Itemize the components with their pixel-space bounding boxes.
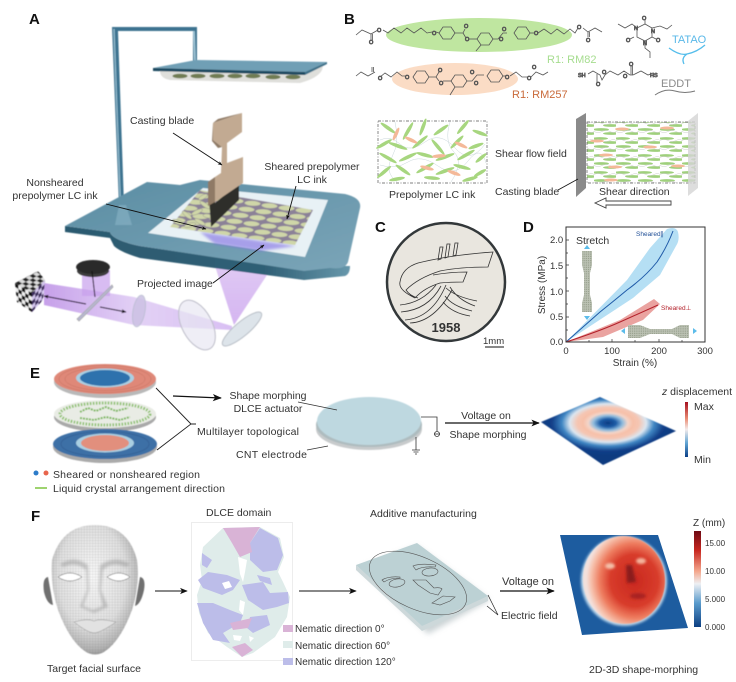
legend: region: Sheared or nonsheared region <box>53 469 200 481</box>
bracket lines <box>156 388 196 450</box>
label: EDDT <box>655 78 695 95</box>
label: CNT electrode: CNT electrode <box>236 449 307 461</box>
curve: sheared parallel <box>566 231 673 342</box>
arrow: to manufacturing <box>299 590 356 592</box>
label: projected image: Projected image <box>137 278 213 290</box>
label: TATAO: TATAO <box>672 34 707 46</box>
box: sheared ink <box>576 113 698 197</box>
panel: B molecules and shear alignment <box>344 11 707 208</box>
actuator disc <box>316 397 422 450</box>
molecule: RM257: O <box>505 75 510 81</box>
band: sheared perpendicular <box>566 299 660 342</box>
molecule: TATAO: N <box>643 41 647 47</box>
label: prepolymer LC ink: Prepolymer LC ink <box>389 189 476 201</box>
molecule: RM257: O <box>474 81 479 87</box>
molecule: RM257: O <box>532 65 537 71</box>
optical path <box>15 260 266 356</box>
legend: nematic directions <box>283 624 396 668</box>
colorbar min: Min <box>694 454 711 466</box>
label: EDDT: EDDT <box>661 78 691 90</box>
molecule: EDDT: O <box>596 82 601 88</box>
legend: nematic directions: Nematic direction 60° <box>295 641 390 652</box>
molecule: TATAO: N <box>651 29 655 35</box>
colorbar <box>685 402 688 457</box>
colorbar labels: 0.000 <box>705 623 726 632</box>
axis tick labels: 100 <box>604 346 620 357</box>
label: casting blade: Casting blade <box>495 186 559 198</box>
bottom disc <box>53 429 157 463</box>
molecule: EDDT <box>578 62 658 88</box>
legend: nematic directions: Nematic direction 120° <box>295 657 396 668</box>
leader lines <box>106 133 296 283</box>
molecule: RM257: O <box>378 76 383 82</box>
molecule: RM82: O <box>586 38 591 44</box>
projection beam to stage <box>215 266 267 325</box>
molecule: RM82: O <box>534 31 539 37</box>
colorbar labels: 15.00 <box>705 539 726 548</box>
label: sheared ink: LC ink <box>297 174 328 186</box>
label: voltage on: Voltage on <box>502 576 554 588</box>
purple beams <box>44 283 232 330</box>
circuit wiring <box>412 417 440 454</box>
eyes <box>58 573 130 581</box>
arrow to actuator <box>173 396 221 398</box>
leader: casting blade <box>558 179 578 190</box>
label: voltage on: Voltage on <box>461 410 511 422</box>
vertical dogbone sample <box>582 245 592 320</box>
axis titles: Strain (%) <box>613 358 657 369</box>
colorbar labels <box>705 539 726 632</box>
panel label F: F <box>31 508 40 525</box>
molecule: RM82: O <box>377 28 382 34</box>
arrow: voltage <box>445 422 539 424</box>
label: RM82: R1: RM82 <box>547 54 597 66</box>
horizontal dogbone sample <box>621 325 697 338</box>
DMD chip <box>15 271 45 312</box>
molecule: RM82: O <box>432 31 437 37</box>
mirror <box>218 308 266 350</box>
black target disc <box>76 260 110 277</box>
scale bar: 1mm <box>483 336 504 347</box>
label: shape morphing actuator: DLCE actuator <box>234 403 303 415</box>
molecule: RM257: O <box>439 81 444 87</box>
logo coin: 1958 <box>432 320 460 335</box>
mesh face <box>44 525 144 654</box>
molecule: EDDT: SH <box>578 73 586 79</box>
label: target facial surface: Target facial surface <box>47 663 141 675</box>
ink layer <box>170 190 313 245</box>
molecule: RM82: O <box>369 40 374 46</box>
molecule: RM257: O <box>470 70 475 76</box>
panel: E actuator <box>30 364 732 495</box>
optical arrows <box>44 271 126 312</box>
panel: A printing setup <box>12 11 360 356</box>
molecule: EDDT: O <box>623 74 628 80</box>
axis tick labels: 0 <box>563 346 569 357</box>
label: 2D-3D morphing: 2D-3D shape-morphing <box>589 664 698 676</box>
axis tick labels: 0.5 <box>550 312 563 323</box>
band: sheared parallel <box>566 228 679 342</box>
lips <box>74 620 116 633</box>
left blade <box>576 113 586 197</box>
label: stretch: Stretch <box>576 235 609 247</box>
colorbar title: Z (mm) <box>693 518 725 529</box>
axes box <box>566 227 705 342</box>
lens 1 <box>130 294 148 328</box>
lens 2 <box>171 294 223 356</box>
panel label A: A <box>29 11 40 28</box>
colorbar labels: 5.000 <box>705 595 726 604</box>
white tray <box>148 188 328 257</box>
colorbar max: Max <box>694 401 715 413</box>
axis tick labels: 300 <box>697 346 713 357</box>
leaders for actuator <box>298 402 337 450</box>
molecule: RM82 <box>356 24 602 51</box>
upper plate with cured film <box>153 60 327 83</box>
label: shear direction: Shear direction <box>599 186 670 198</box>
legend: direction: Liquid crystal arrangement direction <box>53 483 225 495</box>
nose shading <box>60 560 130 613</box>
panel label E: E <box>30 365 40 382</box>
y axis title: Stress (MPa) <box>537 256 548 314</box>
axis tick labels: 2.0 <box>550 235 563 246</box>
highlight: RM257 <box>392 63 518 95</box>
curve: sheared perpendicular <box>566 305 658 342</box>
label: electric field: Electric field <box>501 610 558 622</box>
molecule: TATAO: O <box>642 16 647 22</box>
beam splitter <box>77 285 113 321</box>
arrow: shear direction <box>595 198 671 208</box>
molecule: EDDT: O <box>602 70 607 76</box>
axis tick labels <box>550 235 713 357</box>
molecule: RM257: O <box>438 68 443 74</box>
axis tick labels: 1.5 <box>550 261 563 272</box>
molecule: RM82: O <box>499 37 504 43</box>
molecule: RM82: O <box>502 27 507 33</box>
support frame <box>112 27 197 205</box>
colorbar labels: 10.00 <box>705 567 726 576</box>
right blade <box>688 113 698 196</box>
molecule: TATAO <box>618 16 672 58</box>
label: nonsheared ink: prepolymer LC ink <box>12 190 98 202</box>
colorbar title: z displacement <box>661 386 732 398</box>
arrow: to domain <box>155 590 187 592</box>
label: additive manufacturing: Additive manufacturing <box>370 508 477 520</box>
ears <box>44 577 144 606</box>
panel label B: B <box>344 11 355 28</box>
electric field leader <box>487 595 498 615</box>
molecule: RM257 <box>356 65 548 95</box>
molecule: RM82: O <box>464 24 469 30</box>
middle disc <box>54 400 156 432</box>
casting blade <box>208 113 243 227</box>
molecule: RM82: O <box>577 25 582 31</box>
axis tick labels: 0.0 <box>550 337 563 348</box>
molecule: EDDT: O <box>629 62 634 68</box>
printed face outlines <box>360 538 476 628</box>
colorbar <box>694 531 701 627</box>
chart: stress vs strain <box>537 227 713 369</box>
box: prepolymer LC ink <box>375 118 488 183</box>
domain map <box>192 522 292 660</box>
panel label D: D <box>523 219 534 236</box>
legend: nematic directions: Nematic direction 0° <box>295 624 385 635</box>
panel label C: C <box>375 219 386 236</box>
axis tick labels: 200 <box>651 346 667 357</box>
label: shape morphing: Shape morphing <box>449 429 527 441</box>
label: DLCE domain: DLCE domain <box>206 507 272 519</box>
panel: F facial morphing <box>31 507 726 676</box>
label: multilayer: Multilayer topological <box>197 426 299 438</box>
label: shear flow field: Shear flow field <box>495 148 567 160</box>
nonsheared domain <box>172 193 213 228</box>
stage <box>65 180 360 280</box>
molecule: TATAO: O <box>626 38 631 44</box>
panel: D stress-strain chart <box>523 219 713 369</box>
molecule: RM257: O <box>527 76 532 82</box>
surface heatmap <box>560 535 688 635</box>
molecule: RM257: O <box>405 75 410 81</box>
head <box>52 525 138 654</box>
displacement map <box>541 397 676 465</box>
label: casting blade: Casting blade <box>130 115 194 127</box>
top disc <box>54 364 156 398</box>
molecule: TATAO: N <box>634 26 638 32</box>
label: sheared ink: Sheared prepolymer <box>264 161 360 173</box>
molecule: EDDT: HS <box>650 73 658 79</box>
illustration: printer and optics <box>15 27 360 356</box>
label: RM257: R1: RM257 <box>512 89 568 101</box>
label: sheared perpendicular: Sheared⊥ <box>661 305 692 312</box>
highlight: RM82 <box>386 18 572 52</box>
purple glow under ink <box>200 232 296 251</box>
panel: C printed logo <box>375 219 505 347</box>
label: TATAO <box>669 34 707 64</box>
label: shape morphing actuator: Shape morphing <box>229 390 307 402</box>
axis tick labels: 1.0 <box>550 287 563 298</box>
printed slab <box>356 538 490 634</box>
molecule: RM82: O <box>465 37 470 43</box>
arrow: voltage <box>500 590 554 592</box>
label: nonsheared ink: Nonsheared <box>26 177 84 189</box>
disc stack <box>53 364 157 463</box>
label: sheared parallel: Sheared∥ <box>636 230 664 238</box>
molecule: TATAO: O <box>656 38 661 44</box>
column foot <box>115 205 132 225</box>
facial features <box>605 558 646 599</box>
